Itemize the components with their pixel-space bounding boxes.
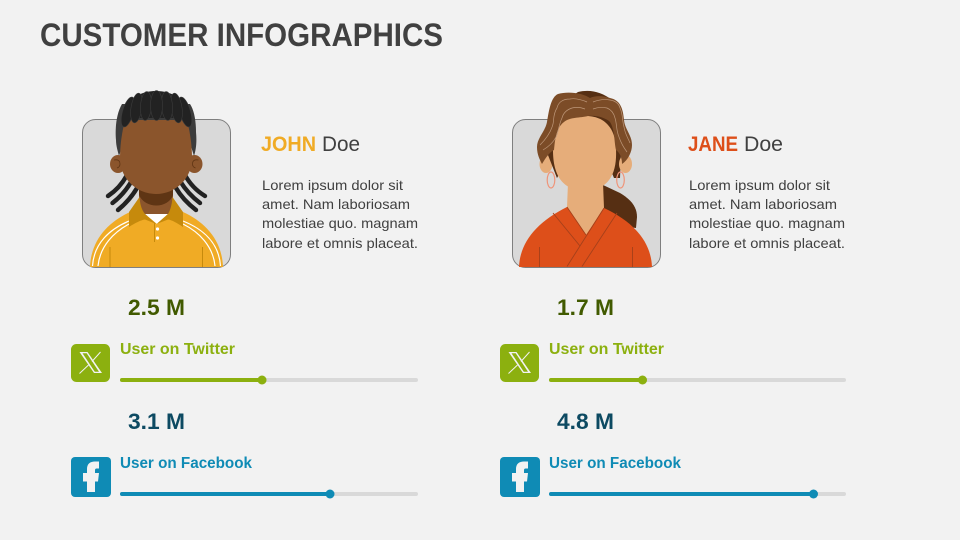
icon: X / Twitter xyxy=(71,344,110,382)
description: Jane: labore et omnis placeat. xyxy=(689,235,845,251)
stat: John Facebook count: 3.1 M xyxy=(128,409,185,434)
name: Jane Doe: JANE xyxy=(688,133,738,156)
slider: Jane Facebook xyxy=(549,490,846,498)
dress xyxy=(519,207,652,267)
hair highlights xyxy=(540,99,630,152)
hair front xyxy=(537,93,632,164)
dress lines xyxy=(540,207,632,267)
panel: Jane Doe profile: Doe xyxy=(744,133,783,156)
description: John: Lorem ipsum dolor sit xyxy=(262,177,403,193)
ponytail xyxy=(603,185,637,228)
earrings xyxy=(547,172,624,188)
description: John: molestiae quo. magnam xyxy=(262,215,418,231)
description: Jane xyxy=(689,177,845,251)
ears xyxy=(540,155,552,173)
undershirt xyxy=(145,214,168,224)
hair dome xyxy=(123,91,190,118)
avatar: Jane xyxy=(512,91,660,268)
back hair xyxy=(116,104,196,156)
neck xyxy=(567,183,604,235)
slider: John Facebook xyxy=(120,490,418,498)
avatar: John xyxy=(82,90,230,268)
icon: X / Twitter xyxy=(500,344,539,382)
title: CUSTOMER INFOGRAPHICS xyxy=(40,17,443,53)
description: Jane: molestiae quo. magnam xyxy=(689,215,845,231)
icon: Facebook xyxy=(500,457,540,497)
stat: John Twitter count: 2.5 M xyxy=(128,295,185,320)
back hair xyxy=(547,91,622,178)
slider: John Twitter xyxy=(120,376,418,384)
label: Jane Twitter: User on Twitter xyxy=(549,341,664,358)
collar xyxy=(129,197,156,227)
back braids xyxy=(108,175,205,210)
ears xyxy=(110,155,126,173)
description: Jane: Lorem ipsum dolor sit xyxy=(689,177,830,193)
stat: Jane Facebook count: 4.8 M xyxy=(557,409,614,434)
braids xyxy=(118,90,195,128)
face xyxy=(120,120,192,194)
dark hair strands xyxy=(546,150,621,178)
neck xyxy=(139,185,173,216)
panel: Jane Doe profile xyxy=(500,91,846,499)
slider: Jane Twitter xyxy=(549,376,846,384)
label: John Facebook: User on Facebook xyxy=(120,455,252,472)
description: John: amet. Nam laboriosam xyxy=(262,196,410,212)
panel: John Doe profile: Doe xyxy=(322,133,360,156)
icon: Facebook xyxy=(71,457,111,497)
name: John Doe: JOHN xyxy=(261,133,316,156)
label: Jane Facebook: User on Facebook xyxy=(549,455,681,472)
shirt xyxy=(90,212,223,267)
label: John Twitter: User on Twitter xyxy=(120,341,235,358)
description: John xyxy=(262,177,418,251)
panel: John Doe profile xyxy=(71,90,418,498)
description: John: labore et omnis placeat. xyxy=(262,235,418,251)
face xyxy=(553,116,616,191)
stat: Jane Twitter count: 1.7 M xyxy=(557,295,614,320)
description: Jane: amet. Nam laboriosam xyxy=(689,196,837,212)
